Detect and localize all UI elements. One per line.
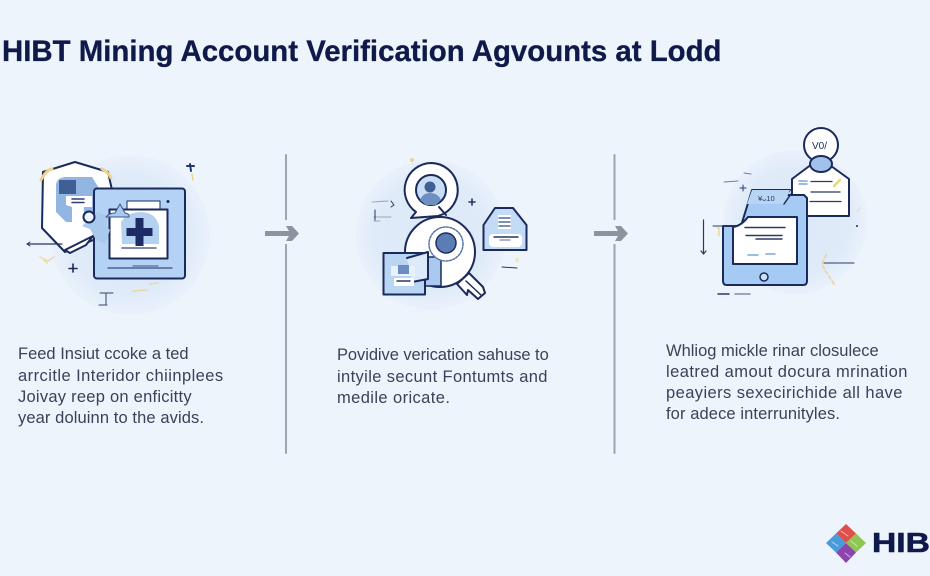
- logo wordmark: HIB: [872, 527, 930, 558]
- text block: step two: intyile secunt Fontumts and: [337, 368, 548, 386]
- text block: step three: peayiers sexecirichide all have: [666, 384, 903, 402]
- title: HIBT Mining Account Verification Agvounts at Lodd: [2, 35, 722, 68]
- text block: step one: [18, 345, 224, 427]
- text block: step one: year doluinn to the avids.: [18, 409, 204, 427]
- text block: step two: Povidive verication sahuse to: [337, 346, 549, 364]
- arrow one: [262, 220, 302, 244]
- icon: tablet and profile card: V0/: [812, 141, 827, 152]
- arrow two: [591, 220, 631, 244]
- text block: step three: leatred amout docura mrination: [666, 363, 908, 381]
- icon: identity magnifier: [356, 158, 526, 310]
- text block: step three: for adece interrunityles.: [666, 405, 840, 423]
- text block: step one: Feed Insiut ccoke a ted: [18, 345, 189, 363]
- text block: step one: Joivay reep on enficitty: [18, 388, 192, 406]
- text block: step two: medile oricate.: [337, 389, 450, 407]
- text block: step three: [666, 342, 908, 423]
- text block: step three: Whliog mickle rinar closulece: [666, 342, 879, 360]
- text block: step one: arrcitle Interidor chiinplees: [18, 367, 224, 385]
- icon: tablet and profile card: ¥ᴗ10: [758, 194, 775, 203]
- divider right: [614, 155, 616, 453]
- text block: step two: [337, 346, 549, 407]
- icon: tablet and profile card: [701, 128, 867, 294]
- icon: logo diamond: [826, 524, 866, 563]
- divider left: [285, 155, 287, 453]
- icon: shield and medical document: [27, 155, 210, 315]
